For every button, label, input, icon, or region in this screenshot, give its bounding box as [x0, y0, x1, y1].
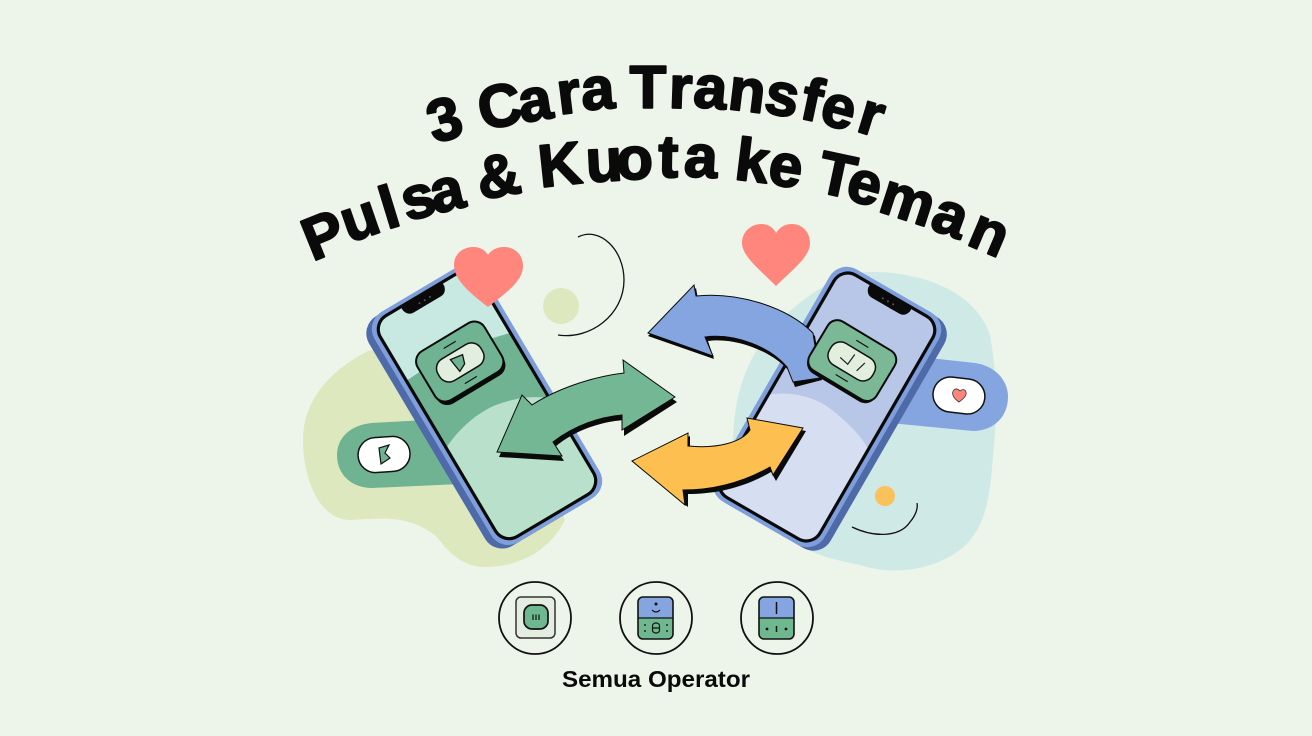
label: Semua Operator: Semua Operator [562, 666, 750, 692]
title: r [851, 79, 893, 150]
notch [865, 283, 912, 318]
card: left phone [412, 317, 510, 410]
card: right phone [803, 316, 900, 408]
blob: left background [303, 350, 565, 567]
tab: left green with pill [337, 420, 460, 488]
title: a [513, 64, 557, 135]
title: a [683, 122, 720, 191]
title: P [292, 196, 354, 274]
tab: right blue with pill [890, 357, 1008, 431]
title: o [616, 125, 654, 192]
arrow: blue [648, 285, 822, 387]
title: u [331, 180, 388, 255]
title: m [873, 159, 944, 240]
title: T [812, 138, 862, 212]
title: k [732, 125, 774, 196]
heart: right [742, 224, 810, 286]
title: s [760, 59, 805, 131]
title: e [815, 71, 864, 144]
title: 3 [419, 82, 470, 156]
title: a [691, 53, 731, 122]
title: n [725, 55, 770, 126]
title: K [535, 129, 585, 200]
heart: left [454, 247, 523, 307]
icon: operator 2 [620, 582, 692, 654]
title: n [960, 194, 1020, 270]
title: a [579, 54, 617, 123]
title: r [668, 54, 694, 121]
arrow: yellow [632, 418, 806, 507]
icon: operator 3 [741, 582, 813, 654]
notch [401, 282, 448, 317]
decoration: left arc and dot [543, 234, 624, 336]
title: e [764, 130, 808, 201]
title: C [472, 69, 528, 143]
title: s [393, 161, 442, 234]
icon: operator 1 [499, 582, 571, 654]
phone: left [366, 268, 602, 548]
title: t [658, 123, 679, 190]
blob: right background [733, 272, 996, 570]
title [292, 53, 1020, 274]
decoration: right arc and dot [852, 486, 917, 534]
title: a [924, 178, 979, 252]
title: u [584, 126, 624, 195]
phone: right [714, 266, 947, 551]
title: & [471, 139, 526, 213]
title: f [796, 65, 830, 135]
title: a [423, 153, 471, 226]
title: e [841, 147, 890, 220]
title: T [630, 54, 666, 121]
title: l [371, 173, 407, 242]
title: r [553, 58, 584, 127]
arrow: green [497, 360, 677, 461]
